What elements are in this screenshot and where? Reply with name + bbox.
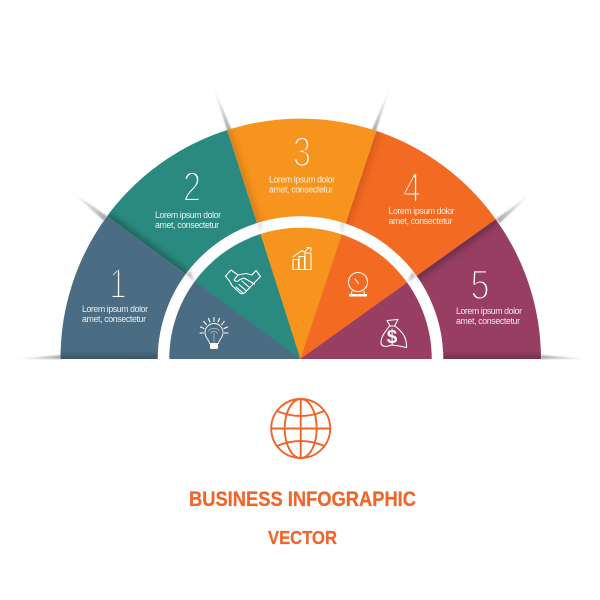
icon: clock (348, 272, 368, 296)
panel: segment 2 (107, 130, 300, 359)
text block 3: amet, consectetur (269, 184, 333, 194)
text block 5: amet, consectetur (456, 316, 520, 326)
number 5: 5 (470, 261, 490, 308)
text block 2 (155, 210, 221, 230)
number 3: 3 (293, 128, 311, 175)
subtitle: VECTOR (268, 528, 337, 548)
text block 3: Lorem ipsum dolor (269, 174, 335, 184)
number 2: 2 (183, 163, 201, 210)
title: BUSINESS INFOGRAPHIC (189, 488, 416, 511)
inner wedges (169, 227, 432, 359)
text block 2: Lorem ipsum dolor (155, 210, 221, 220)
number 1: 1 (110, 260, 126, 307)
icon: bar chart (292, 248, 312, 270)
icon: globe (271, 399, 330, 458)
panel: segment 3 (227, 119, 376, 359)
text block 5: Lorem ipsum dolor (456, 306, 522, 316)
white ring (164, 222, 438, 359)
text block 2: amet, consectetur (155, 220, 219, 230)
panel: segment 5 (300, 219, 541, 359)
text block 1: amet, consectetur (82, 314, 146, 324)
segment edge shadows (60, 130, 541, 359)
icon: light bulb (200, 318, 228, 348)
text block 3 (269, 174, 335, 194)
text block 5 (456, 306, 522, 326)
text block 4: Lorem ipsum dolor (388, 206, 455, 216)
icon: handshake (226, 270, 260, 294)
ring crossing shadows (185, 222, 417, 282)
text block 4 (388, 206, 455, 226)
icon: money bag: $ (387, 327, 398, 348)
panel: segment 1 (60, 216, 301, 359)
icon: money bag (381, 320, 407, 348)
text block 4: amet, consectetur (388, 216, 453, 226)
number 4: 4 (403, 164, 421, 211)
text block 1 (82, 304, 148, 324)
panel: segment 4 (300, 131, 496, 359)
shadow spikes behind the semicircle (14, 85, 590, 359)
text block 1: Lorem ipsum dolor (82, 304, 148, 314)
